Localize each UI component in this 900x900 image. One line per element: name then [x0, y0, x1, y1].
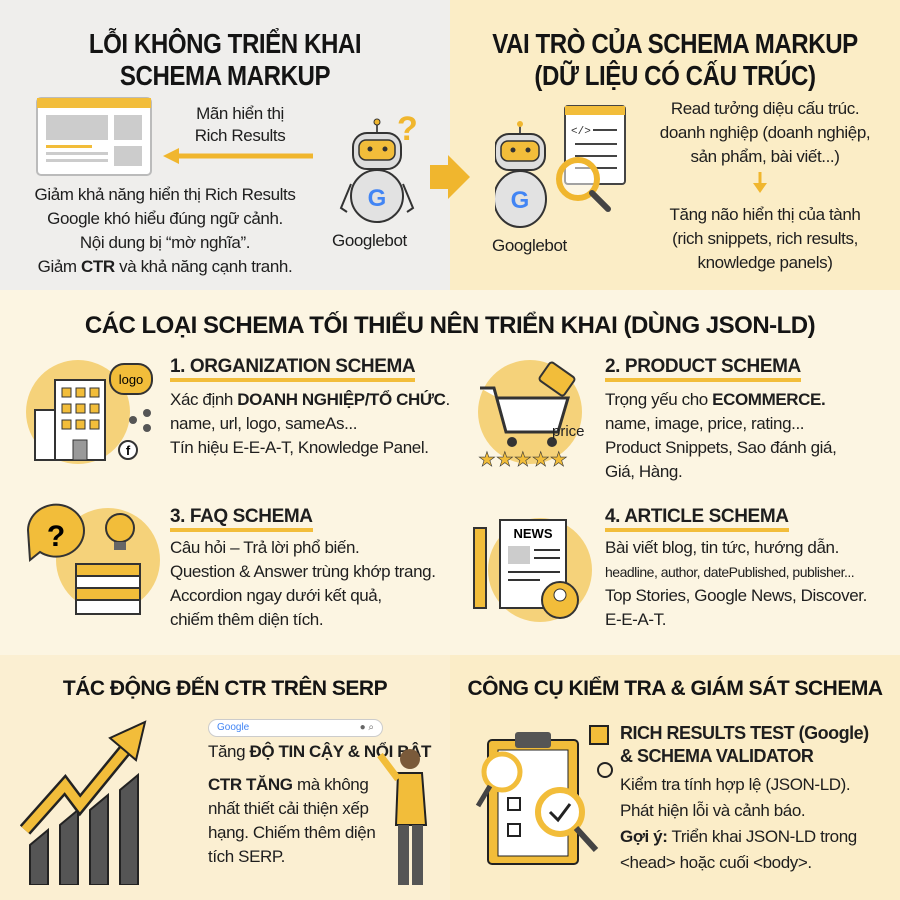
icon: browser window	[36, 97, 152, 176]
search bar	[208, 719, 383, 737]
card: product	[478, 356, 836, 481]
panel: top-right role	[450, 0, 900, 290]
text: Accordion ngay dưới kết quả,	[170, 586, 382, 605]
text: increase visibility: Tăng não hiển thị của tành	[670, 205, 860, 224]
text: Product Snippets, Sao đánh giá,	[605, 438, 836, 457]
icon: news: NEWS	[514, 526, 553, 541]
text: consequences: Google khó hiểu đúng ngữ cảnh.	[47, 209, 283, 228]
panel: schema types	[0, 290, 900, 655]
card: article	[473, 506, 867, 629]
text: read structure: doanh nghiệp (doanh nghiệp,	[660, 123, 870, 142]
icon: person	[377, 749, 428, 885]
text: Trọng yếu cho ECOMMERCE.	[605, 390, 825, 409]
text: Top Stories, Google News, Discover.	[605, 586, 867, 605]
text	[170, 390, 450, 457]
arrow: left	[163, 148, 313, 164]
icon: googlebot confused: G	[368, 185, 386, 212]
arrow: transition	[430, 155, 470, 199]
text: Bài viết blog, tin tức, hướng dẫn.	[605, 538, 839, 557]
text: Xác định DOANH NGHIỆP/TỔ CHỨC.	[170, 390, 450, 409]
text: chiếm thêm diện tích.	[170, 610, 323, 629]
text: ctr tăng	[208, 775, 375, 866]
text: ctr tăng: tích SERP.	[208, 847, 285, 866]
heading: vai trò: VAI TRÒ CỦA SCHEMA MARKUP	[492, 28, 858, 59]
text: Câu hỏi – Trả lời phổ biến.	[170, 538, 359, 557]
text: ctr tăng: CTR TĂNG mà không	[208, 775, 368, 794]
heading: vai trò	[492, 28, 858, 91]
chart: growth arrow bars	[20, 720, 146, 885]
text: read structure	[660, 99, 870, 166]
icon: clipboard	[476, 725, 613, 865]
heading: lỗi không triển khai: SCHEMA MARKUP	[120, 60, 330, 91]
heading: vai trò: (DỮ LIỆU CÓ CẤU TRÚC)	[534, 60, 816, 91]
icon: building: logo	[119, 372, 143, 387]
text: màn hiển thị: Mãn hiển thị	[196, 104, 284, 123]
title: 1. ORGANIZATION SCHEMA	[170, 356, 415, 377]
text: màn hiển thị: Rich Results	[195, 126, 285, 145]
icon: cart: ★★★★★	[478, 447, 568, 471]
text: increase visibility	[670, 205, 860, 272]
text: ctr tăng: nhất thiết cải thiện xếp	[208, 799, 369, 818]
panel: CTR impact	[0, 655, 450, 900]
title: 2. PRODUCT SCHEMA	[605, 356, 801, 377]
text: consequences	[34, 185, 296, 276]
card: organization	[26, 356, 450, 464]
icon: googlebot with code & magnifier: G	[511, 187, 529, 214]
text: E-E-A-T.	[605, 610, 666, 629]
text: Giá, Hàng.	[605, 462, 682, 481]
text	[605, 390, 836, 481]
icon: googlebot confused: ?	[397, 110, 418, 148]
text: details: Phát hiện lỗi và cảnh báo.	[620, 801, 805, 820]
text: read structure: Read tưởng diệu cấu trúc.	[671, 99, 859, 118]
heading: lỗi không triển khai: LỖI KHÔNG TRIỂN KHAI	[89, 28, 361, 59]
label: googlebot: Googlebot	[332, 231, 407, 250]
text: rich results test: & SCHEMA VALIDATOR	[620, 746, 813, 766]
heading: các loại schema: CÁC LOẠI SCHEMA TỐI THIỂU NÊN TRIỂN KHAI (DÙNG JSON-LD)	[85, 312, 815, 339]
icon: building	[26, 360, 153, 464]
text: Question & Answer trùng khớp trang.	[170, 562, 436, 581]
text: consequences: Giảm khả năng hiển thị Rich Results	[34, 185, 295, 204]
text: Tín hiệu E-E-A-T, Knowledge Panel.	[170, 438, 429, 457]
text: consequences: Nội dung bị “mờ nghĩa”.	[80, 233, 250, 252]
icon: googlebot confused	[340, 110, 418, 223]
icon: googlebot with code & magnifier: </>	[571, 126, 591, 138]
panel: top-left error	[0, 0, 450, 290]
icon: cart: price	[552, 423, 585, 440]
icon: faq: ?	[47, 520, 65, 553]
text	[170, 538, 436, 629]
title: 3. FAQ SCHEMA	[170, 506, 313, 527]
icon: cart	[478, 360, 585, 471]
search bar: ● ⌕	[360, 722, 374, 733]
text: consequences: Giảm CTR và khả năng cạnh tranh.	[38, 257, 292, 276]
icon: googlebot with code & magnifier	[495, 105, 626, 228]
text: details: Kiểm tra tính hợp lệ (JSON-LD).	[620, 775, 850, 794]
text: headline, author, datePublished, publisher...	[605, 564, 854, 580]
text: name, url, logo, sameAs...	[170, 414, 357, 433]
title: 4. ARTICLE SCHEMA	[605, 506, 789, 527]
text: details: Gợi ý: Triển khai JSON-LD trong	[620, 827, 857, 846]
text: name, image, price, rating...	[605, 414, 804, 433]
text: read structure: sản phẩm, bài viết...)	[690, 147, 840, 166]
card: faq	[27, 504, 436, 629]
text: ctr tăng: hạng. Chiếm thêm diện	[208, 823, 375, 842]
heading: lỗi không triển khai	[89, 28, 361, 91]
text: rich results test: RICH RESULTS TEST (Google)	[620, 723, 869, 743]
text: increase visibility: (rich snippets, rich results,	[672, 229, 858, 248]
icon: faq	[27, 504, 160, 615]
text: màn hiển thị	[195, 104, 286, 145]
text: details	[620, 775, 857, 872]
text: tăng độ tin cậy: Tăng ĐỘ TIN CẬY & NỔI BẬT	[208, 742, 431, 761]
text: increase visibility: knowledge panels)	[698, 253, 832, 272]
icon: building: f	[126, 443, 131, 458]
label: googlebot: Googlebot	[492, 236, 567, 255]
panel: tools	[450, 655, 900, 900]
heading: CÔNG CỤ KIỂM TRA & GIÁM SÁT SCHEMA	[467, 677, 883, 700]
text: details: <head> hoặc cuối <body>.	[620, 853, 812, 872]
text	[605, 538, 867, 629]
icon: news	[473, 518, 592, 622]
heading: TÁC ĐỘNG ĐẾN CTR TRÊN SERP	[63, 677, 387, 700]
search bar: Google	[217, 722, 249, 733]
arrow: down	[753, 172, 767, 193]
text: rich results test	[620, 723, 869, 766]
